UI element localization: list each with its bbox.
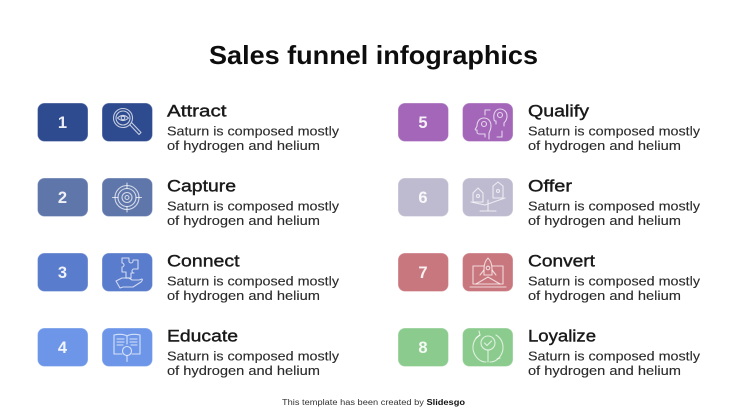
description: of hydrogen and helium (167, 138, 320, 153)
description (167, 198, 339, 228)
icon: two heads with exchange arrows (462, 103, 513, 142)
description: Saturn is composed mostly (528, 348, 700, 364)
description (167, 124, 339, 153)
number badge 5 (398, 103, 448, 142)
number badge 5: 5 (418, 114, 428, 132)
description: of hydrogen and helium (528, 288, 681, 303)
heading: Qualify: Qualify (528, 102, 590, 120)
description: Saturn is composed mostly (167, 274, 339, 288)
heading: Loyalize: Loyalize (528, 326, 596, 346)
description: of hydrogen and helium (528, 138, 681, 153)
item 6: Offer (398, 176, 700, 228)
item 5: Qualify (398, 102, 700, 153)
number badge 8 (398, 328, 448, 366)
number badge 1 (38, 103, 88, 142)
icon: rocket launching from laptop (462, 253, 513, 292)
item 3: Connect (38, 252, 339, 303)
description (167, 274, 339, 303)
description: Saturn is composed mostly (167, 198, 339, 214)
number badge 7 (398, 253, 448, 292)
description (528, 124, 700, 153)
number badge 3: 3 (58, 264, 67, 282)
number badge 3 (38, 253, 88, 292)
item 2: Capture (38, 176, 339, 228)
number badge 6: 6 (418, 189, 428, 207)
description (167, 348, 339, 378)
item 1: Attract (38, 102, 339, 153)
description (528, 348, 700, 378)
description (528, 274, 700, 303)
number badge 1: 1 (58, 114, 67, 132)
icon: open book with magnifier (102, 328, 152, 366)
number badge 7: 7 (418, 264, 428, 282)
heading: Capture: Capture (167, 176, 236, 196)
description: Saturn is composed mostly (528, 274, 700, 288)
heading: Attract: Attract (167, 102, 227, 120)
description: Saturn is composed mostly (528, 198, 700, 214)
number badge 2: 2 (58, 189, 67, 207)
heading: Convert: Convert (528, 252, 595, 270)
icon: circular arrows with check badge (462, 328, 513, 366)
title: Sales funnel infographics (209, 40, 538, 70)
description: of hydrogen and helium (167, 213, 320, 228)
item 7: Convert (398, 252, 700, 303)
number badge 6 (398, 178, 448, 216)
heading: Offer: Offer (528, 176, 572, 196)
description: of hydrogen and helium (528, 213, 681, 228)
icon: puzzle piece over hand (102, 253, 152, 292)
number badge 4: 4 (58, 339, 68, 357)
item 4: Educate (38, 326, 339, 378)
description: of hydrogen and helium (167, 288, 320, 303)
description: Saturn is composed mostly (167, 348, 339, 364)
number badge 2 (38, 178, 88, 216)
item 8: Loyalize (398, 326, 700, 378)
icon: magnifying glass with eye (102, 103, 152, 142)
description: Saturn is composed mostly (167, 124, 339, 138)
number badge 8: 8 (418, 339, 428, 357)
icon: balance scale with houses (462, 178, 513, 216)
number badge 4 (38, 328, 88, 366)
icon: target with gear (102, 178, 152, 216)
heading: Connect: Connect (167, 252, 240, 270)
description (528, 198, 700, 228)
description: of hydrogen and helium (167, 363, 320, 378)
description: of hydrogen and helium (528, 363, 681, 378)
heading: Educate: Educate (167, 326, 238, 346)
description: Saturn is composed mostly (528, 124, 700, 138)
footer credit: This template has been created by Slidesgo (282, 398, 465, 407)
